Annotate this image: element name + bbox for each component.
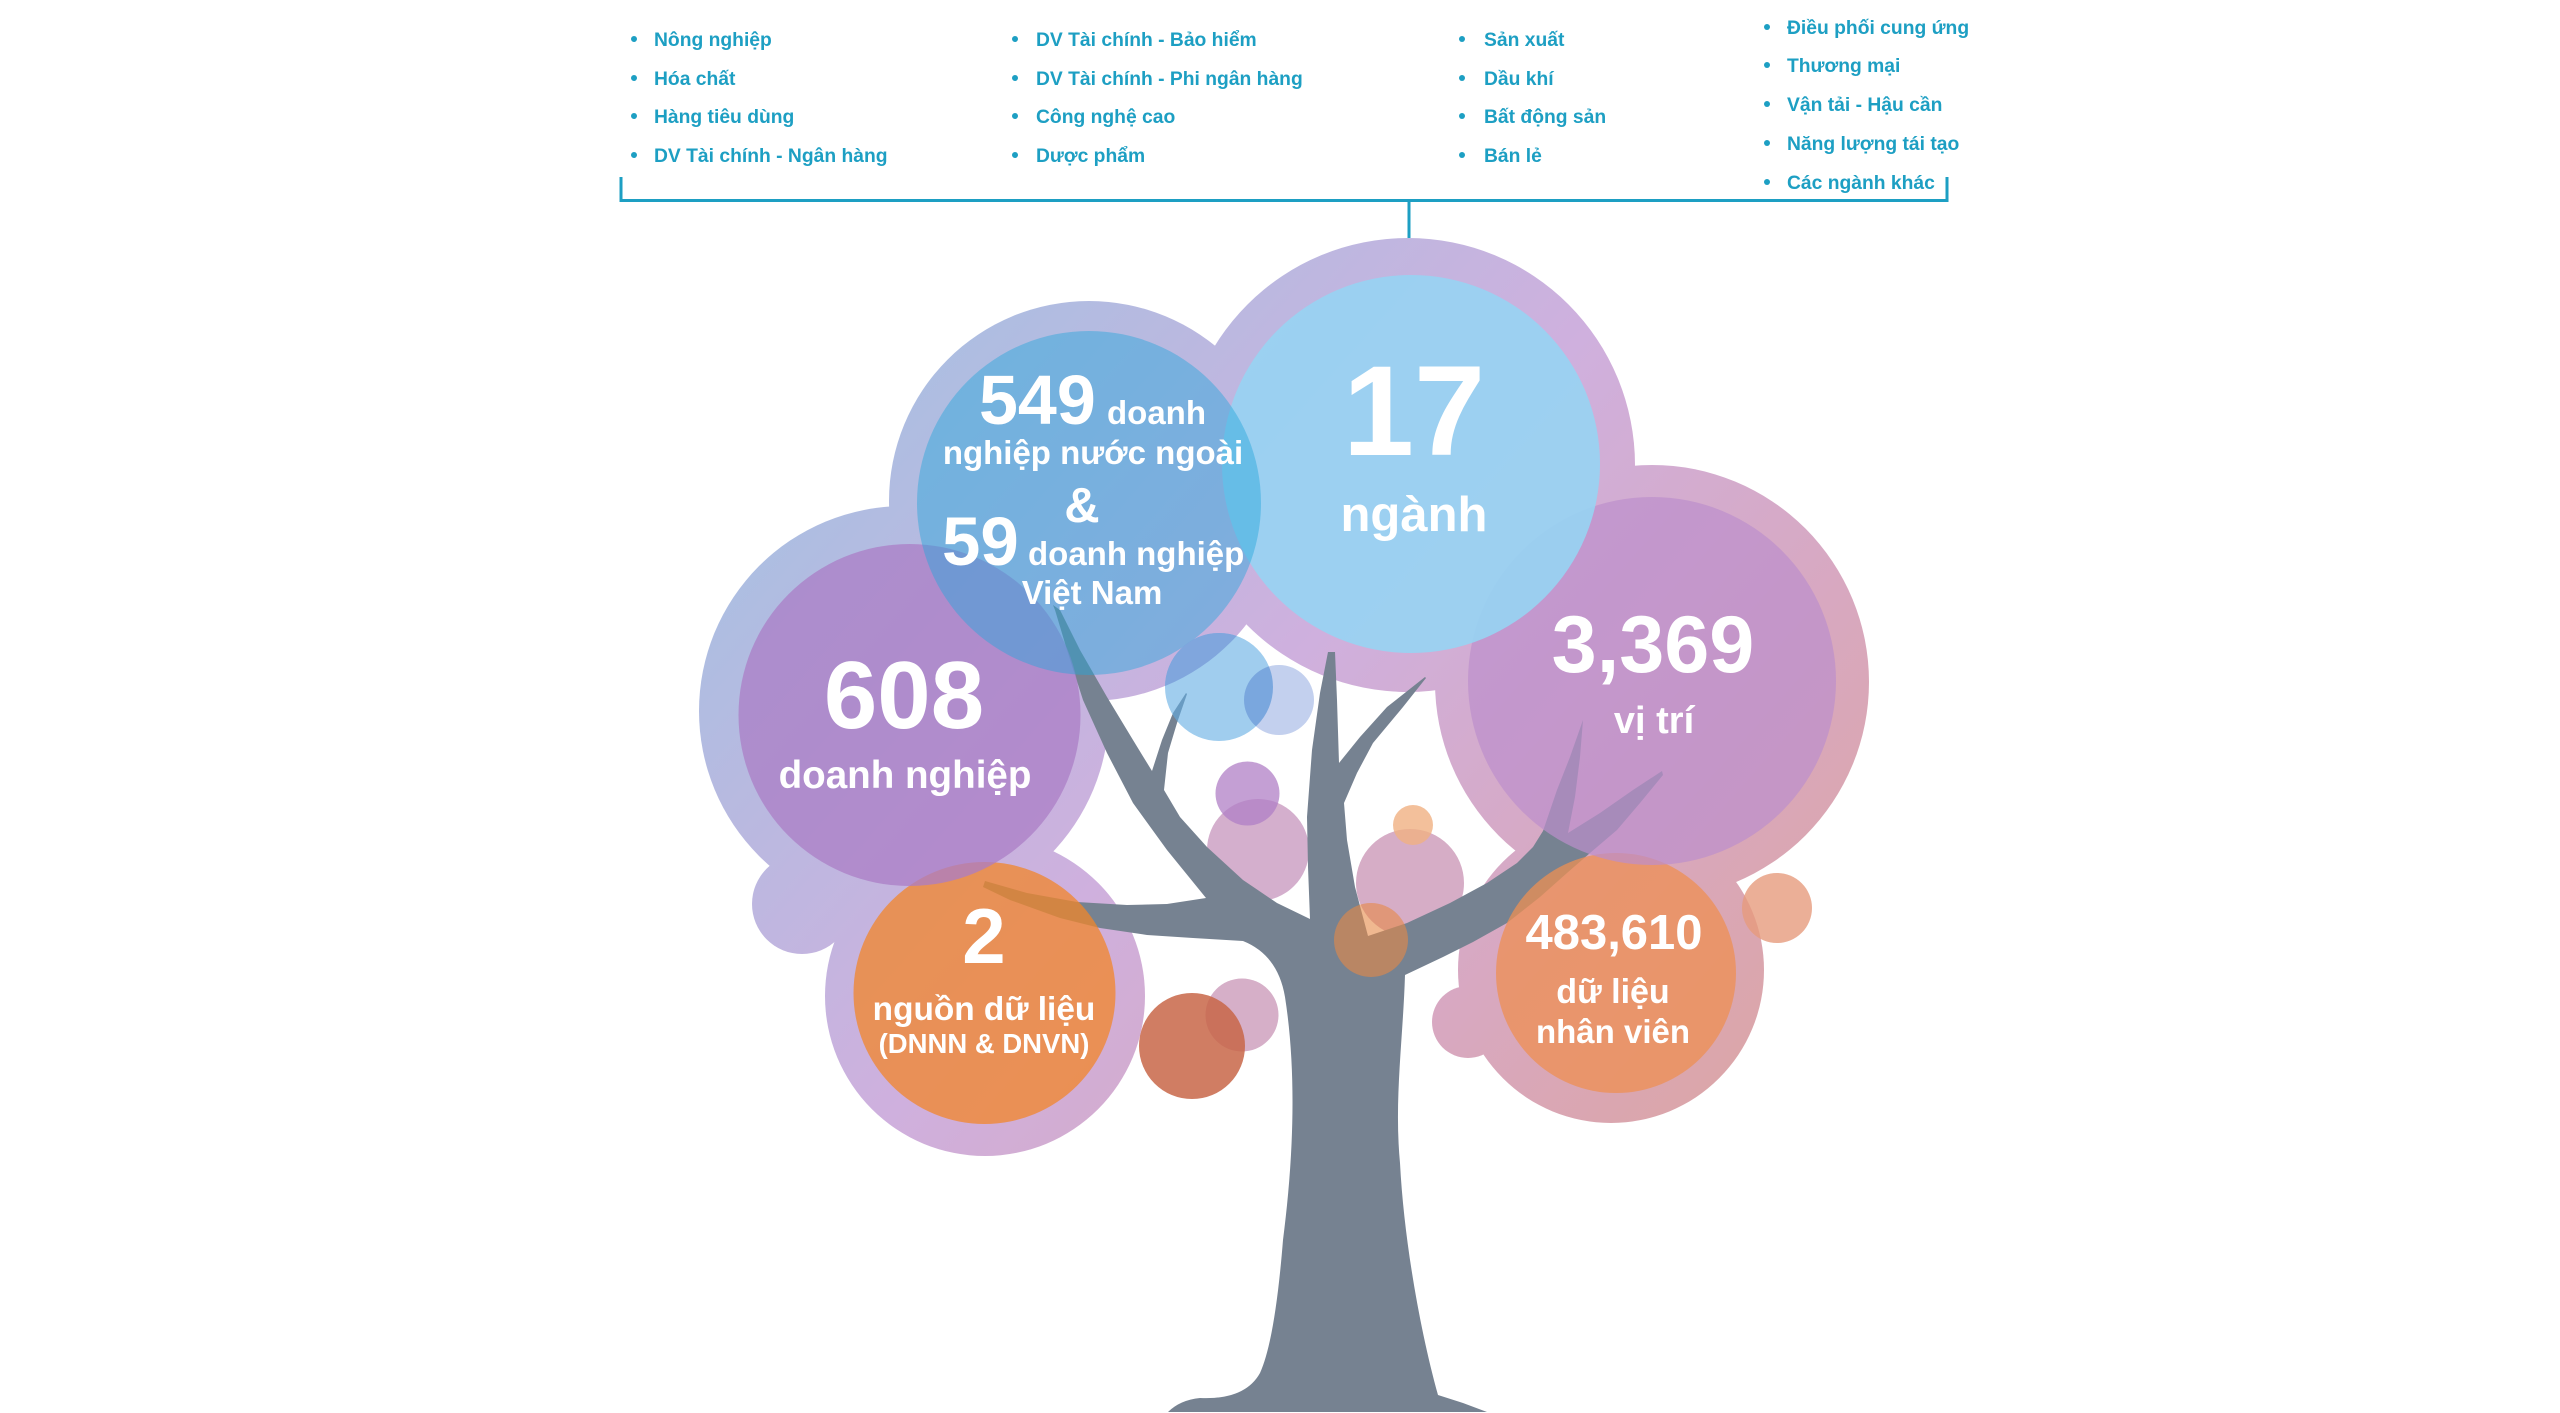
industry list: column 4: Điều phối cung ứng (1787, 18, 1969, 39)
industry list: column 2 (1012, 29, 1303, 167)
stat: 608 companies: 608 (824, 642, 984, 749)
stat: 17 industries (1341, 340, 1487, 542)
industry list: column 4 (1764, 18, 1969, 194)
stat: 483,610 employee data: nhân viên (1536, 1013, 1690, 1050)
stat: 549 foreign and 59 Vietnamese companies: doanh (1107, 394, 1206, 431)
industry list: column 1 (631, 30, 888, 167)
stat: 608 companies: doanh nghiệp (779, 754, 1031, 797)
stat: 483,610 employee data: dữ liệu (1556, 973, 1670, 1011)
stat: 549 foreign and 59 Vietnamese companies: & (1064, 479, 1100, 533)
stat: 549 foreign and 59 Vietnamese companies: nghiệp nước ngoài (943, 434, 1243, 471)
industry list: column 2: DV Tài chính - Bảo hiểm (1036, 29, 1257, 51)
industry list: column 3: Sản xuất (1484, 30, 1565, 51)
industry list: column 3: Dầu khí (1484, 69, 1554, 90)
industry list: column 3: Bất động sản (1484, 107, 1606, 128)
stat: 2 data sources (873, 892, 1095, 1059)
industry list: column 2: Dược phẩm (1036, 145, 1145, 167)
stat: 17 industries: 17 (1343, 340, 1485, 483)
circle: 17 industries (1222, 275, 1600, 653)
industry list: column 1: Hóa chất (654, 69, 736, 90)
stat: 3,369 positions: vị trí (1614, 700, 1696, 742)
stat: 549 foreign and 59 Vietnamese companies (942, 361, 1244, 611)
industry list: column 4: Các ngành khác (1787, 173, 1935, 194)
industry list: column 3: Bán lẻ (1484, 146, 1542, 167)
stat: 3,369 positions (1552, 600, 1754, 742)
stat: 549 foreign and 59 Vietnamese companies: 59 (942, 503, 1019, 580)
stat: 608 companies (779, 642, 1031, 797)
industry list: column 1: DV Tài chính - Ngân hàng (654, 146, 888, 167)
orange circle on trunk (1334, 903, 1408, 977)
overlap of blue circle with crown (1165, 633, 1236, 686)
stat: 483,610 employee data: 483,610 (1525, 906, 1703, 960)
industry list: column 2: Công nghệ cao (1036, 107, 1175, 128)
infographic canvas (620, 18, 1968, 1412)
circle: 3,369 positions (1468, 497, 1836, 865)
stat: 2 data sources: nguồn dữ liệu (873, 991, 1095, 1028)
bracket connecting list to tree (621, 177, 1947, 238)
stat: 549 foreign and 59 Vietnamese companies: 549 (979, 361, 1096, 439)
stat: 2 data sources: (DNNN & DNVN) (879, 1028, 1089, 1059)
small decorative circles behind the tree (1139, 762, 1812, 1099)
circle: 608 companies (738, 544, 1080, 886)
circle: 483,610 employee data (1496, 853, 1736, 1093)
blue circles above the branch tips (1165, 633, 1314, 741)
tree trunk and branches (983, 605, 1663, 1412)
industry list: column 4: Năng lượng tái tạo (1787, 134, 1960, 155)
industry list: column 3 (1459, 30, 1606, 167)
industry list: column 1: Nông nghiệp (654, 30, 772, 51)
stat: 2 data sources: 2 (962, 892, 1006, 980)
stat: 549 foreign and 59 Vietnamese companies: doanh nghiệp (1028, 535, 1244, 572)
industry list: column 4: Thương mại (1787, 56, 1900, 77)
tree crown: merged outer circles (699, 238, 1869, 1156)
industry list: column 2: DV Tài chính - Phi ngân hàng (1036, 69, 1303, 90)
stat: 17 industries: ngành (1341, 488, 1487, 542)
industry list: column 1: Hàng tiêu dùng (654, 107, 794, 128)
industry list: column 4: Vận tải - Hậu cần (1787, 95, 1942, 116)
circle: 2 data sources (854, 862, 1116, 1124)
circle: 549 and 59 companies (917, 331, 1261, 675)
stat: 3,369 positions: 3,369 (1552, 600, 1754, 690)
stat: 483,610 employee data (1525, 906, 1703, 1050)
stat: 549 foreign and 59 Vietnamese companies: Việt Nam (1022, 574, 1162, 611)
